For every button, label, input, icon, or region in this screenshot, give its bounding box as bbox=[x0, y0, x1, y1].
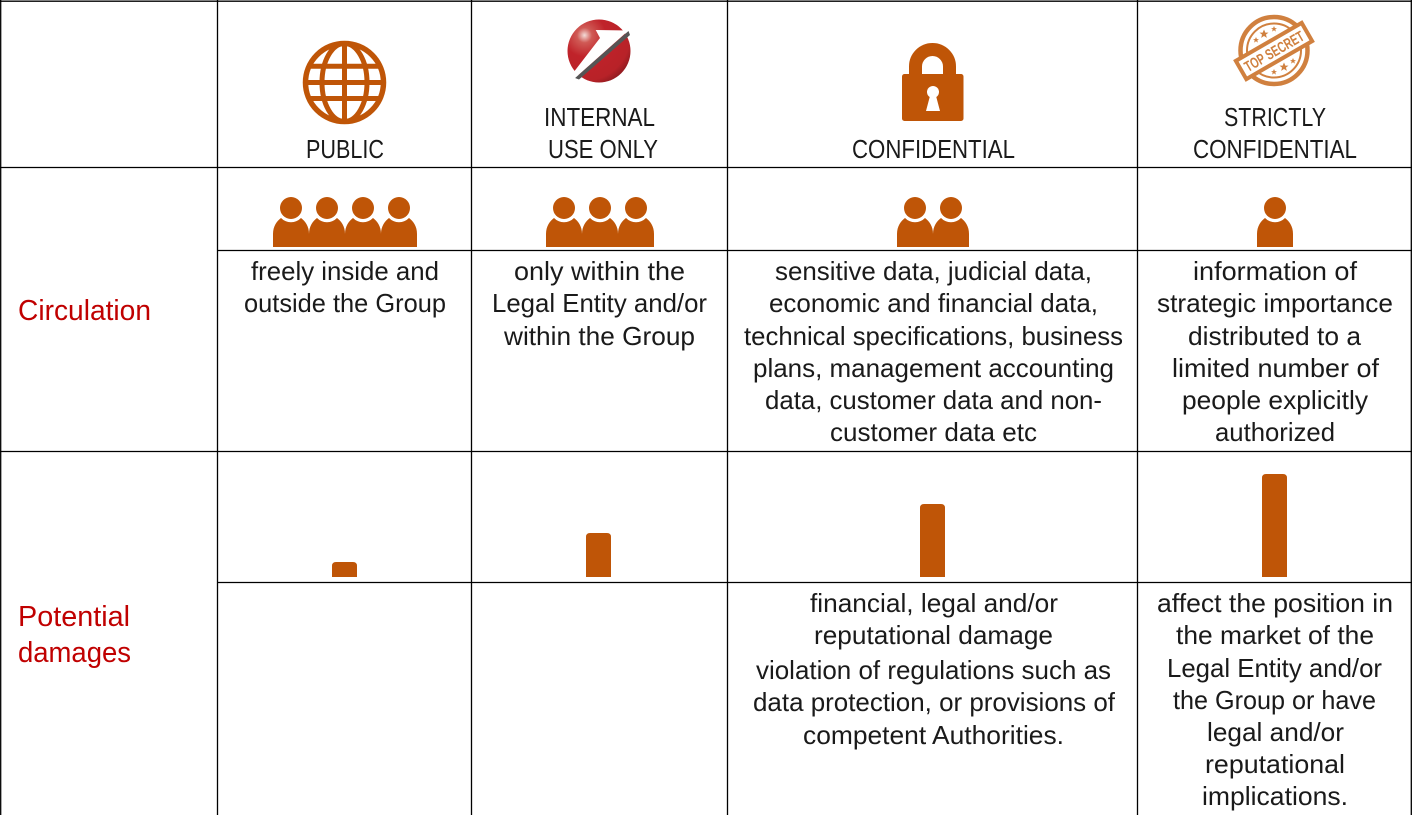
text: strictly confidential circulation: distributed to a bbox=[1188, 321, 1362, 351]
text: confidential circulation: sensitive data, judicial data, bbox=[775, 256, 1092, 286]
text: strictly confidential damages: the Group or have bbox=[1173, 685, 1376, 715]
heading: internal use only bbox=[544, 102, 658, 164]
bar: public damage level bbox=[332, 562, 357, 577]
text: confidential circulation bbox=[744, 256, 1123, 447]
text: public circulation: freely inside and bbox=[251, 256, 439, 286]
text: strictly confidential damages: legal and/or bbox=[1207, 717, 1344, 747]
heading: confidential: CONFIDENTIAL bbox=[852, 134, 1015, 164]
heading: strictly confidential bbox=[1193, 102, 1357, 164]
text: confidential damages bbox=[753, 588, 1116, 750]
row label: potential damages bbox=[18, 601, 131, 669]
text: internal circulation: within the Group bbox=[503, 321, 695, 351]
text: strictly confidential circulation: information of bbox=[1193, 256, 1358, 286]
text: strictly confidential circulation: authorized bbox=[1215, 417, 1335, 447]
bar: strictly confidential damage level bbox=[1262, 474, 1287, 577]
icon: four people bbox=[273, 197, 417, 247]
row label: circulation: Circulation bbox=[18, 295, 151, 327]
bar: confidential damage level bbox=[920, 504, 945, 577]
text: internal circulation: Legal Entity and/or bbox=[492, 288, 707, 318]
icon: padlock bbox=[902, 50, 964, 121]
icon: three people bbox=[546, 197, 654, 247]
heading: public: PUBLIC bbox=[306, 134, 384, 164]
text: confidential circulation: technical specifications, business bbox=[744, 321, 1123, 351]
text: strictly confidential damages: implications. bbox=[1202, 781, 1348, 811]
text: confidential damages: violation of regulations such as bbox=[756, 655, 1111, 685]
icon: globe bbox=[305, 43, 384, 122]
icon: bank logo bbox=[568, 20, 630, 82]
icon: one person bbox=[1257, 197, 1293, 247]
icon: top secret stamp bbox=[1236, 17, 1312, 84]
bar: internal damage level bbox=[586, 533, 611, 577]
text: confidential circulation: plans, management accounting bbox=[753, 353, 1114, 383]
text: strictly confidential circulation: people explicitly bbox=[1182, 385, 1368, 415]
text: strictly confidential damages: reputational bbox=[1205, 749, 1345, 779]
heading: strictly confidential: STRICTLY bbox=[1224, 102, 1326, 132]
text: internal circulation: only within the bbox=[514, 256, 685, 286]
text: public circulation bbox=[244, 256, 446, 318]
text: confidential damages: data protection, or provisions of bbox=[753, 687, 1116, 717]
heading: internal use only: USE ONLY bbox=[548, 134, 658, 164]
heading: internal use only: INTERNAL bbox=[544, 102, 655, 132]
text: strictly confidential damages: Legal Entity and/or bbox=[1167, 653, 1382, 683]
heading: strictly confidential: CONFIDENTIAL bbox=[1193, 134, 1357, 164]
text: strictly confidential circulation bbox=[1157, 256, 1393, 447]
text: strictly confidential damages: affect the position in bbox=[1157, 588, 1393, 618]
text: confidential circulation: economic and financial data, bbox=[769, 288, 1098, 318]
icon: top secret stamp: TOP SECRET bbox=[1242, 28, 1307, 76]
text: strictly confidential circulation: limited number of bbox=[1172, 353, 1380, 383]
text: strictly confidential damages bbox=[1157, 588, 1393, 811]
text: internal circulation bbox=[492, 256, 707, 351]
icon: two people bbox=[897, 197, 969, 247]
row label: potential damages: Potential bbox=[18, 601, 130, 633]
text: confidential damages: reputational damage bbox=[814, 620, 1053, 650]
text: public circulation: outside the Group bbox=[244, 288, 446, 318]
text: confidential damages: competent Authorities. bbox=[803, 720, 1064, 750]
text: confidential circulation: data, customer data and non- bbox=[765, 385, 1102, 415]
text: confidential circulation: customer data etc bbox=[830, 417, 1037, 447]
text: strictly confidential damages: the market of the bbox=[1176, 620, 1374, 650]
text: confidential damages: financial, legal and/or bbox=[810, 588, 1058, 618]
text: strictly confidential circulation: strategic importance bbox=[1157, 288, 1393, 318]
row label: potential damages: damages bbox=[18, 637, 131, 669]
